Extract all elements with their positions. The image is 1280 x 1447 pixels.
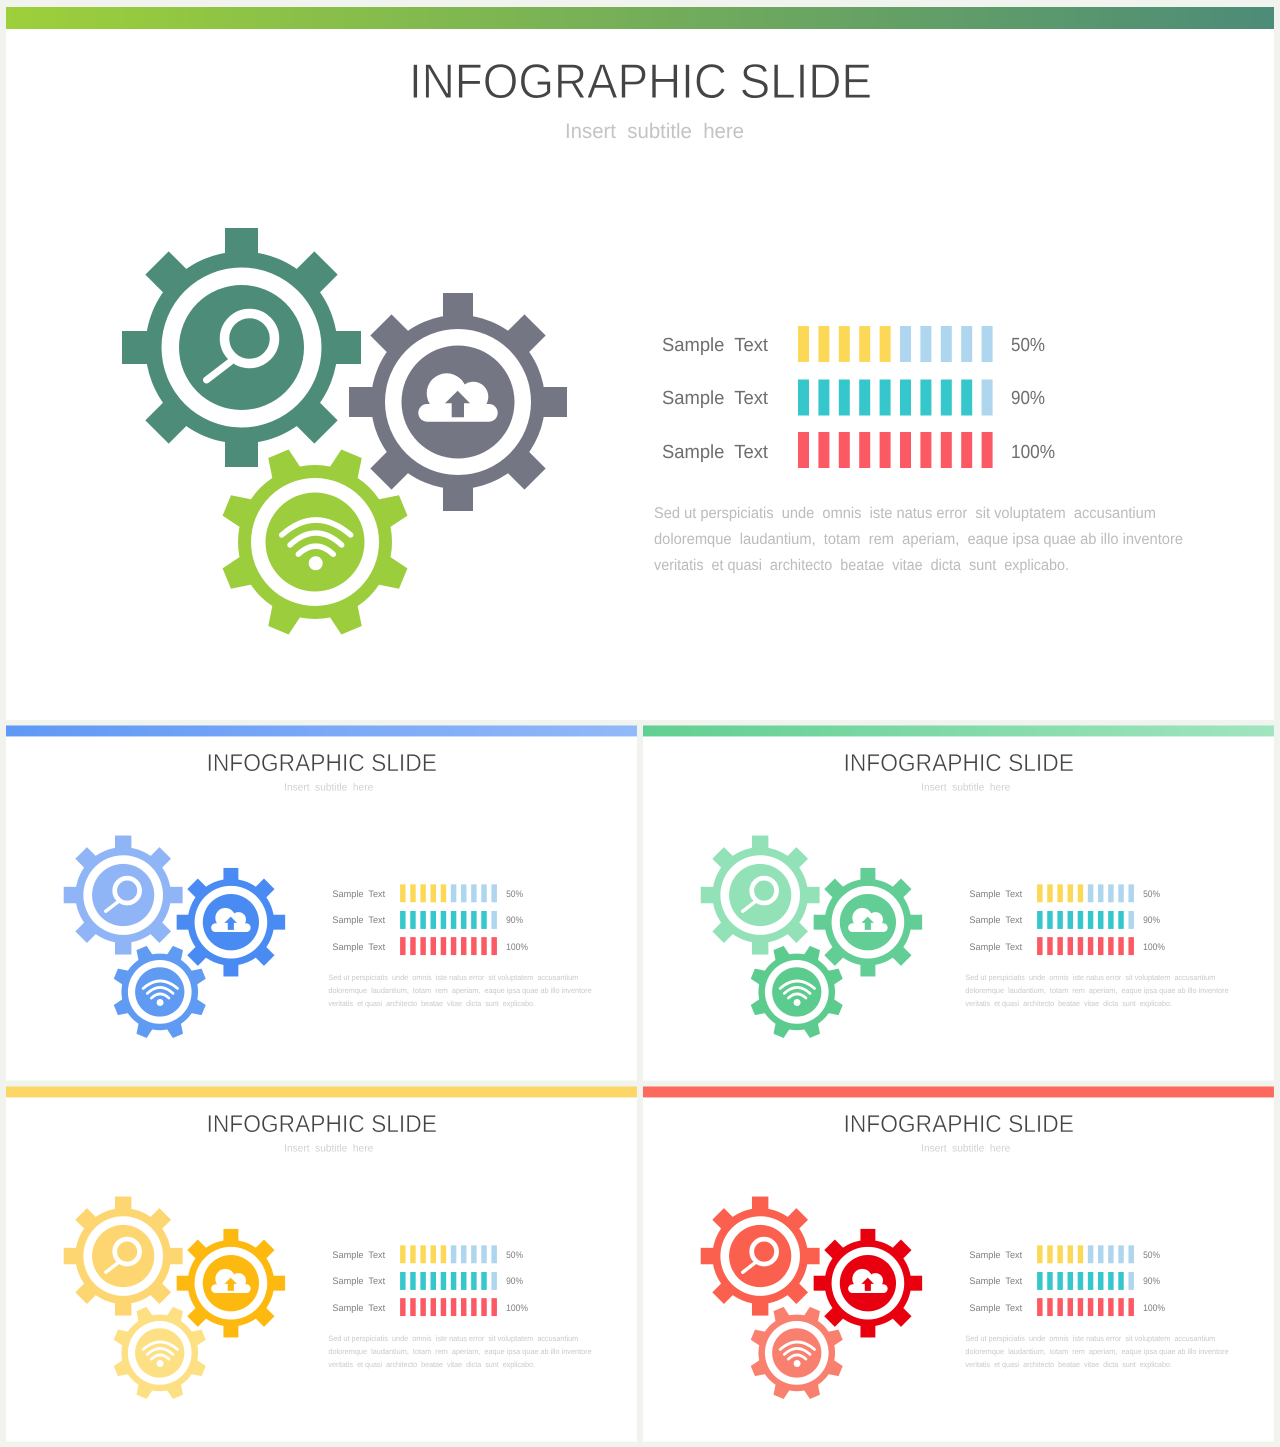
value 50%: 50% (506, 889, 523, 899)
value 90%: 90% (506, 1276, 523, 1287)
value 90%: 90% (1011, 388, 1045, 409)
body text: Sed ut perspiciatis unde omnis iste natus error sit voluptatem accusantium (965, 1334, 1215, 1343)
body text: Sed ut perspiciatis unde omnis iste natus error sit voluptatem accusantium (965, 973, 1215, 982)
panel: green slide (643, 725, 1274, 1081)
subtitle: Insert subtitle here (284, 782, 373, 793)
bar label 3: Sample Text (969, 1303, 1023, 1314)
gear: search (701, 1197, 820, 1316)
bar label 3: Sample Text (969, 942, 1023, 953)
progress bars (1037, 884, 1134, 955)
gear: wifi (750, 1306, 844, 1400)
bar label 2: Sample Text (332, 915, 386, 926)
value 50%: 50% (506, 1250, 523, 1260)
value 90%: 90% (1143, 1276, 1160, 1287)
gear: cloud upload (814, 868, 922, 976)
value 100%: 100% (1011, 442, 1055, 463)
body text: doloremque laudantium, totam rem aperiam, eaque ipsa quae ab illo inventore (965, 986, 1229, 995)
value 50%: 50% (1143, 889, 1160, 899)
header bar yellow (6, 1086, 637, 1097)
gear: search (122, 228, 361, 467)
body text (965, 1334, 1229, 1369)
gear: cloud upload (349, 293, 567, 511)
bar label 2: Sample Text (969, 1276, 1023, 1287)
panel: red slide (643, 1086, 1274, 1442)
gear: wifi (113, 1306, 207, 1400)
body text: veritatis et quasi architecto beatae vitae dicta sunt explicabo. (965, 1360, 1172, 1369)
body text: veritatis et quasi architecto beatae vitae dicta sunt explicabo. (328, 999, 535, 1008)
value 100%: 100% (506, 942, 528, 953)
gear: wifi (113, 945, 207, 1039)
bar label 2: Sample Text (969, 915, 1023, 926)
title: INFOGRAPHIC SLIDE (207, 749, 437, 776)
header bar green (643, 725, 1274, 736)
progress bars (400, 884, 497, 955)
subtitle: Insert subtitle here (921, 1143, 1010, 1154)
gear: search (701, 836, 820, 955)
bar label 2: Sample Text (332, 1276, 386, 1287)
header bar red (643, 1086, 1274, 1097)
gear: search (64, 836, 183, 955)
panel: main slide (6, 7, 1274, 720)
body text (654, 505, 1183, 574)
progress bars (798, 326, 993, 468)
subtitle: Insert subtitle here (565, 120, 744, 143)
gear: cloud upload (177, 1229, 285, 1337)
gear: wifi (750, 945, 844, 1039)
bar label 1: Sample Text (969, 1250, 1023, 1260)
bar label 1: Sample Text (969, 889, 1023, 899)
progress bars (400, 1245, 497, 1316)
body text: doloremque laudantium, totam rem aperiam, eaque ipsa quae ab illo inventore (654, 531, 1183, 548)
title: INFOGRAPHIC SLIDE (409, 55, 872, 109)
body text: doloremque laudantium, totam rem aperiam, eaque ipsa quae ab illo inventore (965, 1347, 1229, 1356)
value 90%: 90% (1143, 915, 1160, 926)
gear: cloud upload (814, 1229, 922, 1337)
subtitle: Insert subtitle here (284, 1143, 373, 1154)
gear: search (64, 1197, 183, 1316)
body text (965, 973, 1229, 1008)
gear: wifi (221, 448, 409, 636)
value 100%: 100% (506, 1303, 528, 1314)
panel: yellow slide (6, 1086, 637, 1442)
body text: Sed ut perspiciatis unde omnis iste natus error sit voluptatem accusantium (654, 505, 1156, 522)
progress bars (1037, 1245, 1134, 1316)
body text: doloremque laudantium, totam rem aperiam, eaque ipsa quae ab illo inventore (328, 986, 592, 995)
body text: veritatis et quasi architecto beatae vitae dicta sunt explicabo. (654, 557, 1069, 574)
body text: veritatis et quasi architecto beatae vitae dicta sunt explicabo. (965, 999, 1172, 1008)
title: INFOGRAPHIC SLIDE (844, 749, 1074, 776)
bar label 1: Sample Text (662, 335, 769, 356)
body text (328, 1334, 592, 1369)
panel: blue slide (6, 725, 637, 1081)
value 90%: 90% (506, 915, 523, 926)
value 100%: 100% (1143, 1303, 1165, 1314)
subtitle: Insert subtitle here (921, 782, 1010, 793)
bar label 1: Sample Text (332, 1250, 386, 1260)
bar label 3: Sample Text (332, 1303, 386, 1314)
body text: Sed ut perspiciatis unde omnis iste natus error sit voluptatem accusantium (328, 1334, 578, 1343)
value 100%: 100% (1143, 942, 1165, 953)
bar label 2: Sample Text (662, 388, 769, 409)
value 50%: 50% (1143, 1250, 1160, 1260)
header gradient bar (6, 7, 1274, 29)
title: INFOGRAPHIC SLIDE (844, 1110, 1074, 1137)
bar label 3: Sample Text (332, 942, 386, 953)
body text: doloremque laudantium, totam rem aperiam, eaque ipsa quae ab illo inventore (328, 1347, 592, 1356)
header bar blue (6, 725, 637, 736)
value 50%: 50% (1011, 335, 1045, 356)
bar label 1: Sample Text (332, 889, 386, 899)
body text: Sed ut perspiciatis unde omnis iste natus error sit voluptatem accusantium (328, 973, 578, 982)
title: INFOGRAPHIC SLIDE (207, 1110, 437, 1137)
body text (328, 973, 592, 1008)
gear: cloud upload (177, 868, 285, 976)
bar label 3: Sample Text (662, 442, 769, 463)
body text: veritatis et quasi architecto beatae vitae dicta sunt explicabo. (328, 1360, 535, 1369)
